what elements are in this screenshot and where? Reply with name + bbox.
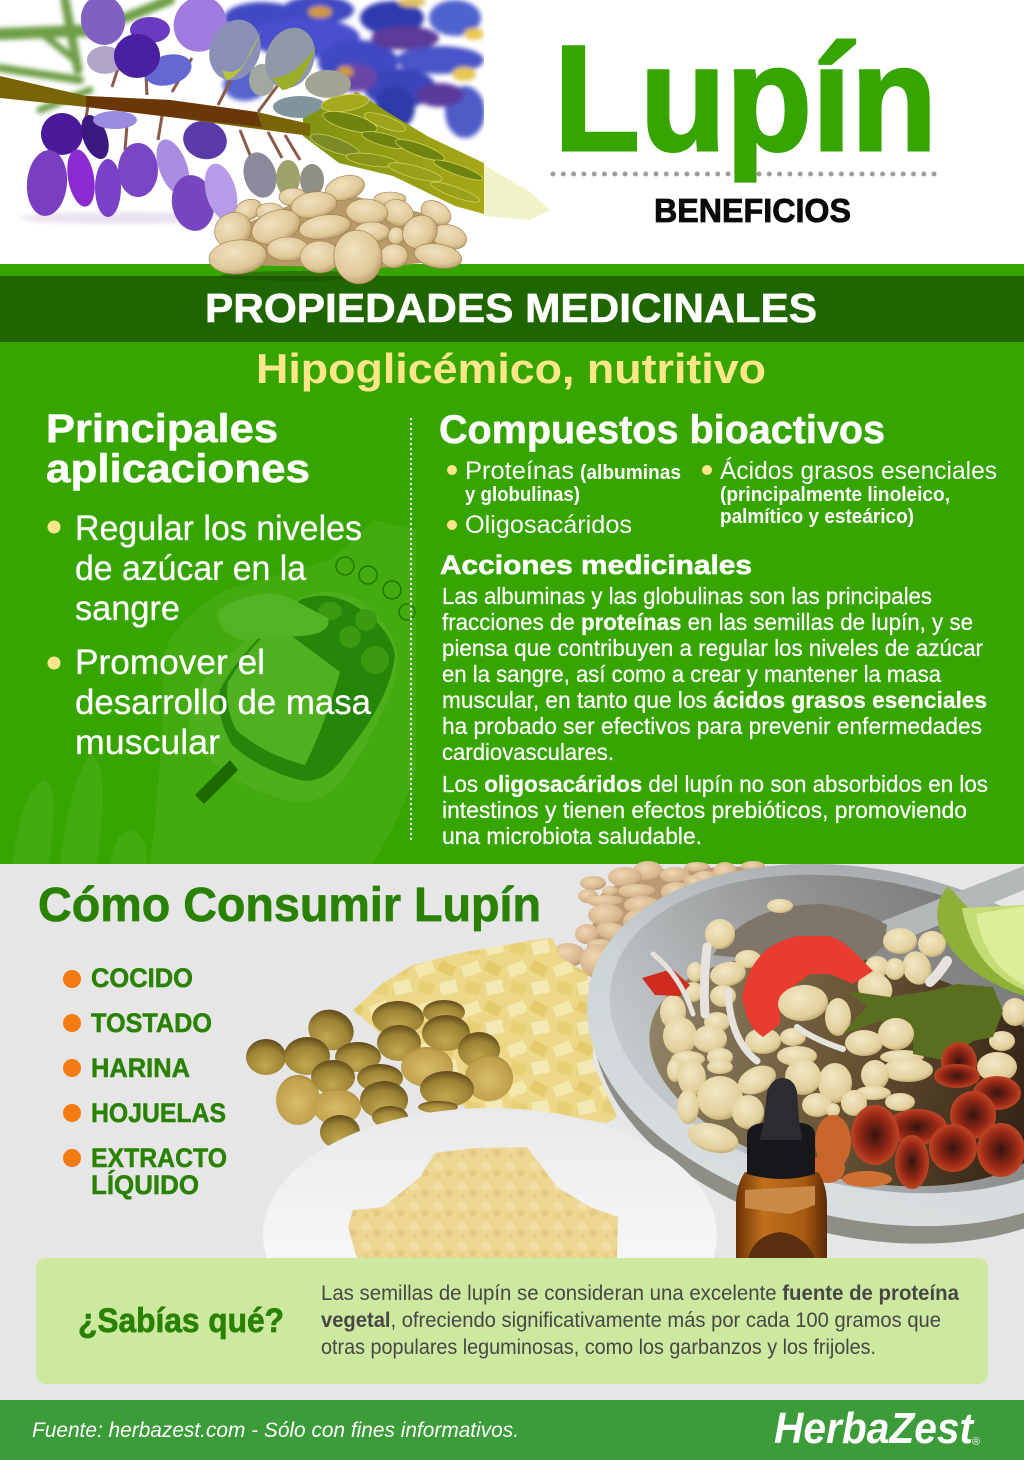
footer source: Fuente: herbazest.com - Sólo con fines informativos.: [32, 1419, 519, 1442]
bowl inside: [610, 874, 1024, 1194]
meter side buttons: [336, 557, 415, 620]
text block: acciones 1: piensa que contribuyen a regular los niveles de azúcar: [442, 635, 983, 661]
roasted red corn: [811, 1042, 1024, 1189]
meter dark ring: [219, 596, 395, 781]
blurred green leaves: [0, 0, 170, 110]
illustration: lupin flakes: [353, 938, 617, 1123]
callout text: [321, 1282, 959, 1359]
callout heading: ¿Sabías qué?: [78, 1302, 284, 1340]
item: regular azúcar: sangre: [75, 589, 180, 628]
text block: acciones 1: ha probado ser efectivos para prevenir enfermedades: [442, 713, 982, 739]
meter screen: [227, 625, 340, 765]
bullets: [447, 465, 712, 530]
compound: ácidos grasos: palmítico y esteárico): [720, 506, 914, 528]
compound: ácidos grasos: [720, 456, 997, 528]
meter buttons: [318, 602, 389, 674]
compound: proteínas: y globulinas): [465, 484, 580, 506]
text block: acciones 1: en la sangre, así como a crear y mantener la masa: [442, 661, 941, 687]
green-yellow flower tip: [303, 92, 484, 214]
hand: [150, 520, 416, 864]
subheading: Hipoglicémico, nutritivo: Hipoglicémico, nutritivo: [256, 345, 766, 392]
background: header white: [0, 0, 1024, 264]
flour powder: [348, 1147, 618, 1258]
text block: acciones 1: Las albuminas y las globulinas son las principales: [442, 583, 932, 609]
illustration: white plate with flour: [263, 1108, 717, 1362]
fingers: [13, 755, 147, 864]
heading: cómo consumir lupín: Cómo Consumir Lupín: [38, 879, 541, 932]
illustration: lupin flower branch: [0, 0, 485, 234]
tomato: [742, 936, 873, 1037]
rubber dropper bulb: [760, 1078, 802, 1140]
item labels: EXTRACTO: [91, 1143, 227, 1173]
item labels: HOJUELAS: [91, 1098, 226, 1128]
text block: acciones 1: muscular, en tanto que los ácidos grasos esenciales: [442, 687, 987, 713]
bottle dark lower patch: [748, 1232, 815, 1258]
compound: ácidos grasos: Ácidos grasos esenciales: [720, 456, 997, 485]
compound: oligosacáridos: Oligosacáridos: [465, 511, 632, 539]
item: regular azúcar: de azúcar en la: [75, 549, 307, 588]
small red pepper: [642, 969, 690, 996]
callout text: vegetal, ofreciendo significativamente más por cada 100 gramos que: [321, 1309, 941, 1332]
lupin beans: [660, 899, 1024, 1158]
main green panel: [0, 342, 1024, 864]
title: Lupín: Lupín: [554, 14, 937, 182]
subtitle: Beneficios: BENEFICIOS: [654, 192, 851, 229]
callout panel: [36, 1258, 988, 1384]
panel: principales aplicaciones: [46, 407, 372, 762]
heading: aplicaciones: [46, 447, 310, 491]
callout: ¿Sabías qué?: [36, 1258, 988, 1384]
illustration: bowl of lupin salad: [586, 864, 1024, 1244]
text block: acciones 2: una microbiota saludable.: [442, 823, 702, 849]
bottle highlight: [745, 1186, 815, 1214]
item: masa muscular: desarrollo de masa: [75, 683, 372, 722]
footer band: [0, 1400, 1024, 1460]
item labels: TOSTADO: [91, 1008, 212, 1038]
text block: acciones 1: [442, 583, 987, 765]
list: formas de consumo: [63, 963, 227, 1200]
logo registered mark: ®: [972, 1436, 980, 1448]
item: masa muscular: Promover el: [75, 643, 265, 682]
illustration: toasted lupin seeds: [246, 1000, 513, 1149]
item: regular azúcar: Regular los niveles: [75, 509, 362, 548]
bowl base: [597, 1057, 1024, 1244]
flower stalks: [85, 58, 300, 160]
bullets: [63, 970, 81, 1167]
finger on top: [218, 594, 328, 640]
item: regular azúcar: [75, 509, 362, 628]
item labels: LÍQUIDO: [91, 1169, 199, 1200]
stem: [0, 76, 310, 136]
white onion slivers: [653, 947, 947, 1061]
compound: proteínas: Proteínas: [465, 457, 574, 485]
pale faded flower tip outside image: [484, 165, 550, 220]
lime wedge: [937, 886, 1024, 996]
heading: Propiedades medicinales: PROPIEDADES MEDICINALES: [205, 285, 817, 331]
blurred blue flowers: [223, 0, 485, 138]
illustration: hand holding glucose meter: [13, 520, 416, 864]
top green band: [0, 264, 1024, 276]
bullet 2: [48, 656, 60, 670]
compound: ácidos grasos: (principalmente linoleico,: [720, 484, 950, 506]
dotted rule under title: [553, 172, 938, 176]
item: masa muscular: muscular: [75, 723, 220, 762]
illustration: lupin beans pile: [208, 171, 469, 288]
panel: cómo consumir background: [0, 864, 1024, 1400]
text block: acciones 2: Los oligosacáridos del lupín no son absorbidos en los: [442, 771, 988, 797]
subheading: acciones medicinales: Acciones medicinales: [440, 550, 752, 580]
plate: [263, 1108, 717, 1362]
text block: acciones 2: intestinos y tienen efectos prebióticos, promoviendo: [442, 797, 967, 823]
compound: proteínas: [465, 457, 681, 506]
black cap: [747, 1123, 815, 1179]
spoon: [713, 866, 1024, 962]
dotted column divider: [410, 419, 412, 843]
dark title band: [0, 276, 1024, 342]
beans on herbs and round bean: [777, 983, 914, 1056]
green herb dressing: [843, 984, 1003, 1061]
heading: [46, 407, 310, 491]
text block: acciones 1: fracciones de proteínas en las semillas de lupín, y se: [442, 609, 973, 635]
item labels: COCIDO: [91, 963, 193, 993]
bullet 1: [48, 520, 60, 534]
text block: acciones 1: cardiovasculares.: [442, 739, 614, 765]
heading: Compuestos bioactivos: [439, 408, 885, 452]
heading: Principales: [46, 407, 278, 451]
footer logo: HerbaZest: HerbaZest: [774, 1404, 975, 1453]
flower petals: [24, 0, 351, 234]
illustration: extract bottle: [736, 1078, 827, 1258]
soft shadow under the flowers: [20, 212, 220, 224]
item labels: HARINA: [91, 1053, 190, 1083]
compound: proteínas: (albuminas: [580, 462, 681, 484]
illustration: raw tan beans: [551, 861, 765, 994]
panel: compuestos bioactivos: [439, 408, 997, 849]
callout text: Las semillas de lupín se consideran una excelente fuente de proteína: [321, 1282, 959, 1305]
item: masa muscular: [75, 643, 372, 762]
bottle body: [736, 1172, 827, 1258]
item labels: [91, 963, 227, 1200]
callout text: otras populares leguminosas, como los garbanzos y los frijoles.: [321, 1336, 876, 1359]
bowl rim: [586, 864, 1024, 1226]
text block: acciones 2: [442, 771, 988, 849]
food bed: [649, 960, 1024, 1186]
test strip: [195, 760, 238, 804]
meter body: [189, 592, 398, 802]
